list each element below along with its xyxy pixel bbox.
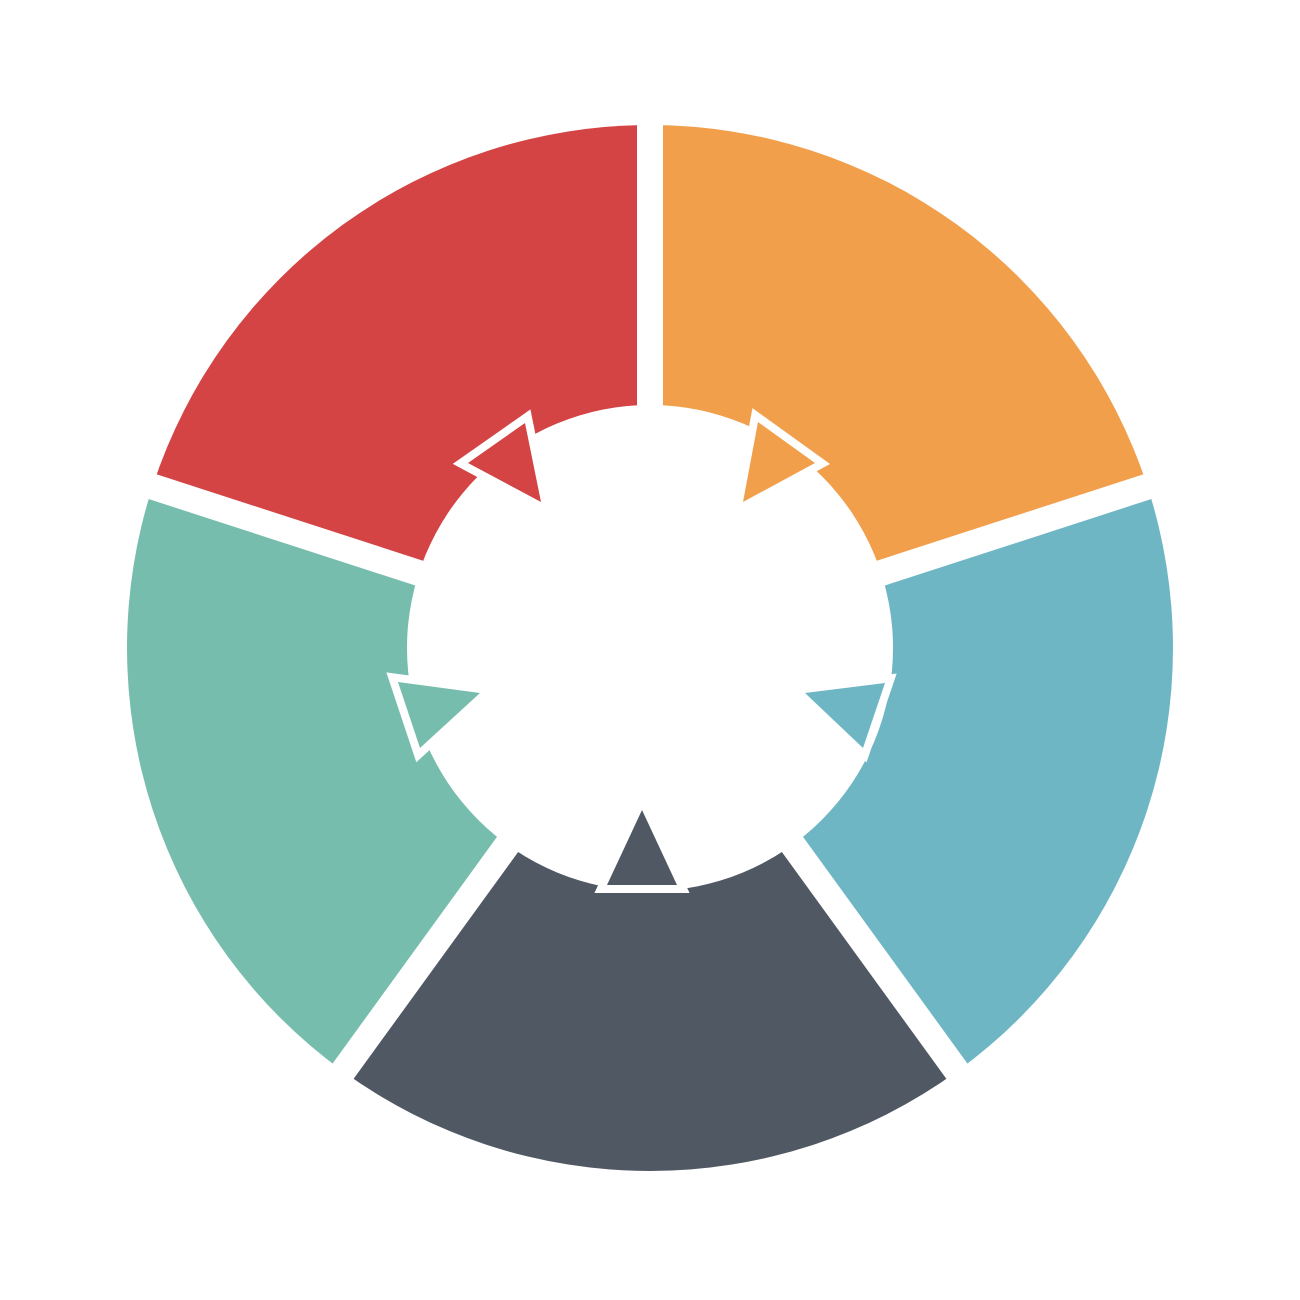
center hole xyxy=(407,405,893,891)
arrow: red xyxy=(468,423,541,502)
arrow: orange xyxy=(743,422,815,502)
segment: red xyxy=(153,125,650,648)
arrow: blue xyxy=(805,683,885,748)
segment: green xyxy=(127,486,650,1071)
segment: dark xyxy=(343,648,957,1171)
segment: blue xyxy=(650,486,1173,1071)
arrow: dark xyxy=(607,810,677,885)
arrow: green xyxy=(398,682,480,748)
segment: orange xyxy=(650,125,1147,648)
